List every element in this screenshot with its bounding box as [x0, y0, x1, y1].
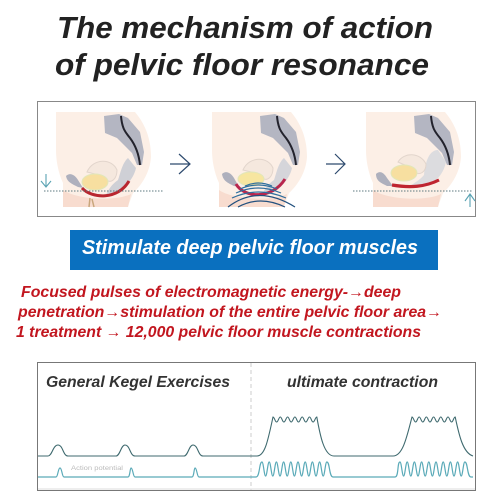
heading: general Kegel exercises: General Kegel Exercises	[46, 374, 230, 391]
diagram: relaxed pelvic floor	[56, 112, 151, 207]
action potential curve	[38, 462, 473, 477]
electromagnetic wave arcs	[228, 183, 295, 207]
title: The mechanism of action	[57, 11, 433, 45]
heading: ultimate contraction: ultimate contraction	[287, 374, 438, 391]
icon: teal up arrow	[465, 194, 475, 207]
diagram: contracted pelvic floor	[366, 112, 461, 207]
panel: contraction comparison chart	[38, 362, 476, 490]
red description text: Focused pulses of electromagnetic energy-→deep	[21, 284, 401, 301]
banner	[70, 230, 438, 270]
title: of pelvic floor resonance	[55, 48, 429, 82]
dotted level line, left	[44, 190, 163, 192]
red description text	[16, 284, 442, 341]
red description text: 1 treatment → 12,000 pelvic floor muscle contractions	[16, 324, 421, 341]
red description text: penetration→stimulation of the entire pelvic floor area→	[17, 304, 442, 321]
muscle tension curve	[38, 417, 473, 456]
diagram: pelvic floor under electromagnetic waves	[212, 112, 307, 207]
banner: Stimulate deep pelvic floor muscles	[82, 237, 418, 259]
label: action potential: Action potential	[71, 466, 123, 472]
title	[55, 11, 433, 82]
panel: pelvic floor movement sequence	[38, 102, 476, 216]
arrow: step two to three	[326, 154, 345, 174]
icon: teal down arrow	[41, 174, 51, 187]
dotted level line, right	[353, 190, 473, 192]
arrow: step one to two	[170, 154, 190, 174]
